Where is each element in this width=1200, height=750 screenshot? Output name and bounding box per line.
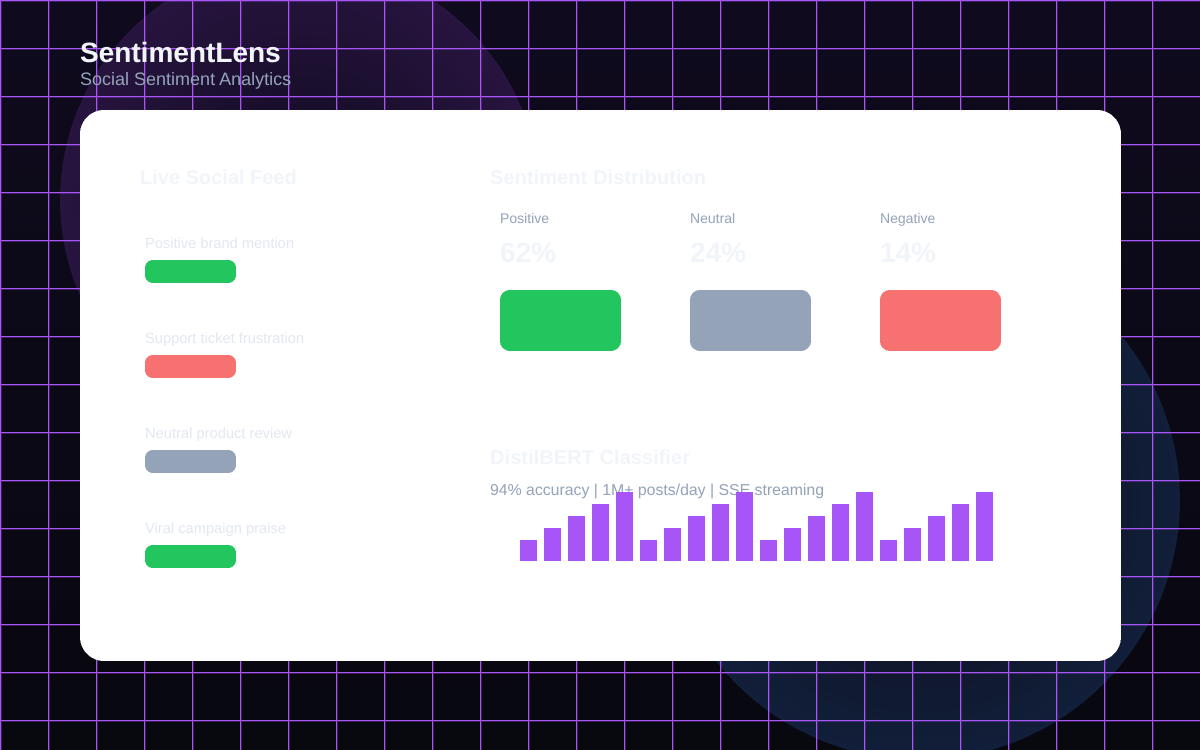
classifier metrics: 94% accuracy | 1M+ posts/day | SSE streaming bbox=[490, 482, 824, 499]
header bbox=[80, 37, 291, 89]
feed item: positive brand mention: Positive brand mention bbox=[145, 236, 294, 252]
feed item: support ticket frustration: Support ticket frustration bbox=[145, 331, 304, 347]
bar chart bbox=[520, 492, 993, 561]
stat: positive: Positive bbox=[500, 210, 549, 226]
main card bbox=[80, 110, 1121, 661]
feed item: neutral product review: Neutral product review bbox=[145, 426, 292, 442]
title: SentimentLens bbox=[80, 37, 281, 68]
panel: sentiment distribution bbox=[490, 167, 1001, 351]
stat: neutral: 24% bbox=[690, 237, 746, 268]
feed item: viral campaign praise bbox=[145, 521, 286, 568]
heading: distilbert classifier: DistilBERT Classifier bbox=[490, 447, 690, 469]
panel: live social feed bbox=[140, 167, 304, 568]
subtitle: Social Sentiment Analytics bbox=[80, 69, 291, 89]
background circle: blue bbox=[660, 240, 1180, 750]
stat: negative: 14% bbox=[880, 237, 936, 268]
feed item: neutral product review bbox=[145, 426, 292, 473]
feed item: positive brand mention bbox=[145, 236, 294, 283]
panel: distilbert classifier bbox=[490, 447, 993, 561]
stat: neutral: Neutral bbox=[690, 210, 735, 226]
heading: sentiment distribution: Sentiment Distribution bbox=[490, 167, 706, 189]
stat: neutral bbox=[690, 210, 811, 351]
background circle: purple bbox=[60, 0, 540, 440]
feed item: support ticket frustration bbox=[145, 331, 304, 378]
stat: positive bbox=[500, 210, 621, 351]
heading: live social feed: Live Social Feed bbox=[140, 167, 297, 189]
stat: negative: Negative bbox=[880, 210, 935, 226]
stat: positive: 62% bbox=[500, 237, 556, 268]
stat: negative bbox=[880, 210, 1001, 351]
feed item: viral campaign praise: Viral campaign praise bbox=[145, 521, 286, 537]
